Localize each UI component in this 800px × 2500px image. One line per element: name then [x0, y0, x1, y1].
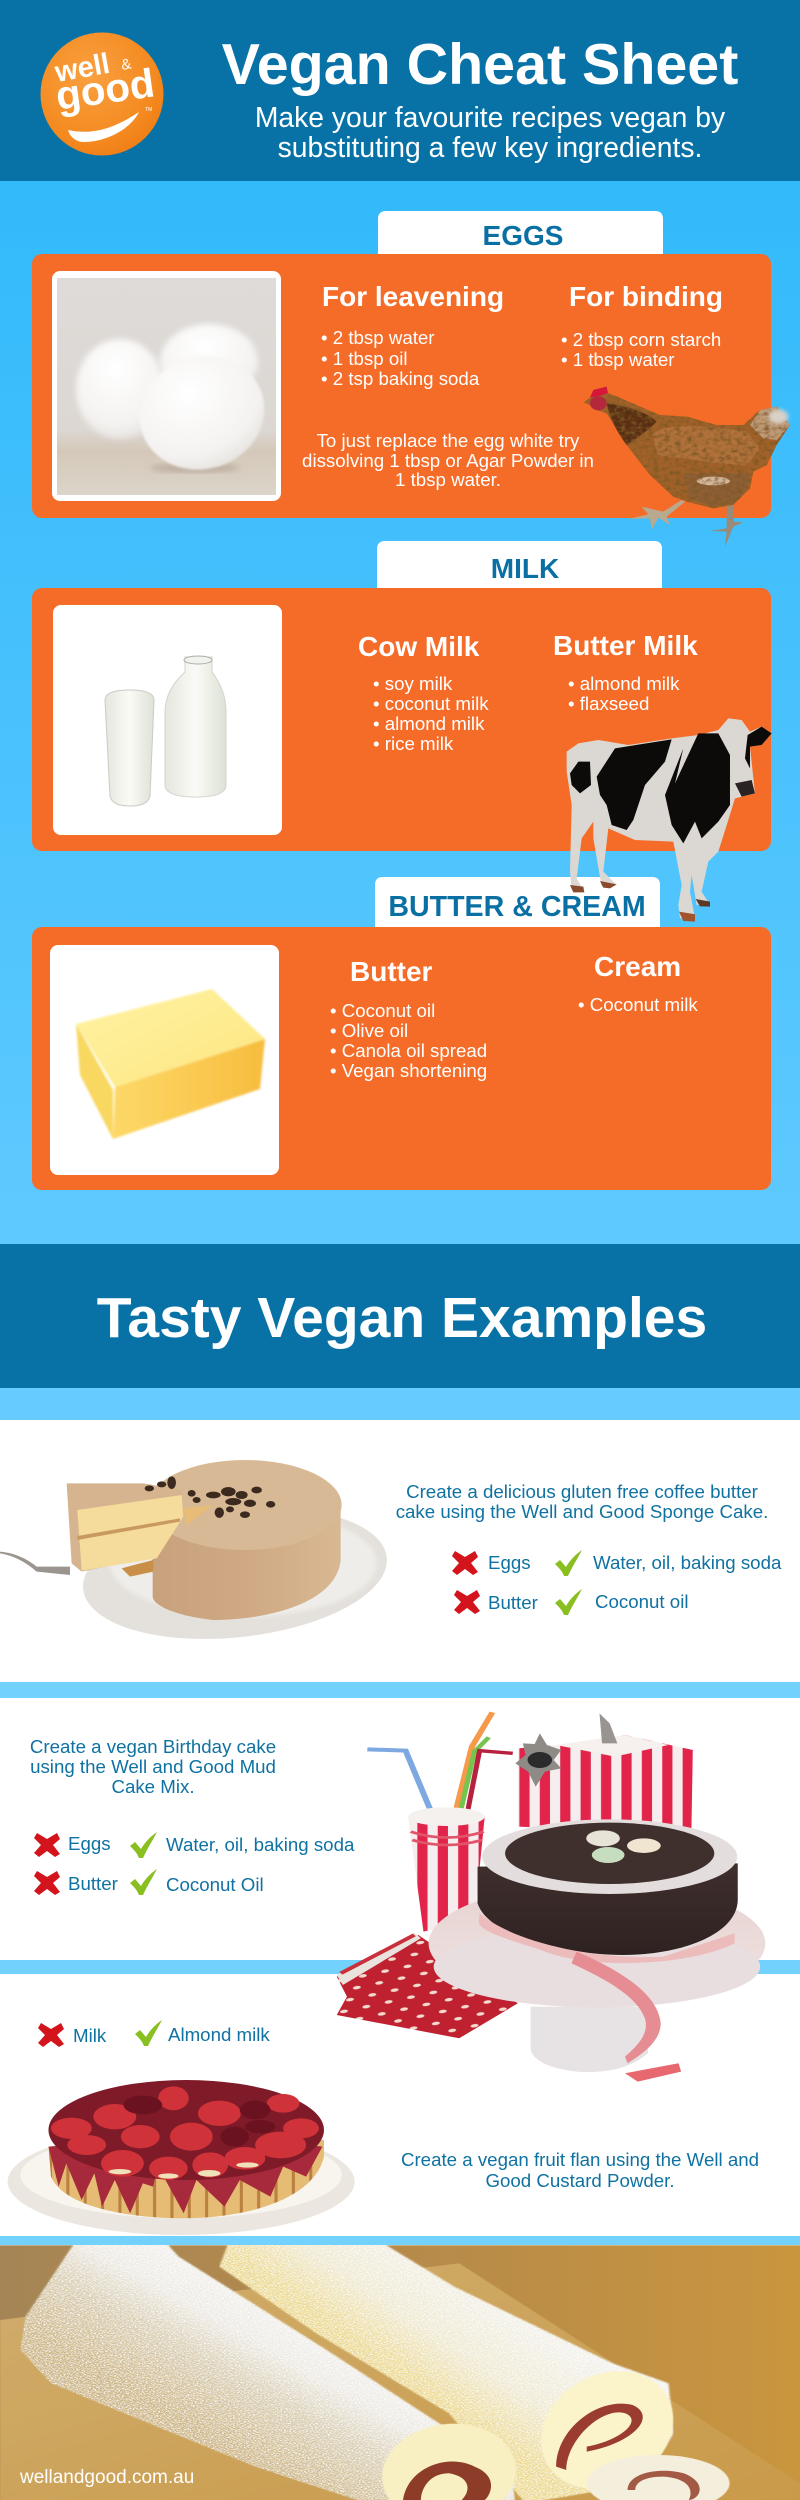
list: butter milk: • almond milk	[568, 673, 680, 694]
text: example mud cake: Cake Mix.	[111, 1776, 195, 1797]
tab: butter and cream: BUTTER & CREAM	[388, 891, 646, 923]
cup	[408, 1810, 485, 1932]
back roll	[219, 2240, 673, 2500]
panel: example fruit flan	[0, 1974, 800, 2236]
swap row: butter	[454, 1589, 688, 1615]
front roll end	[382, 2424, 516, 2500]
logo: good	[53, 60, 157, 119]
straws	[367, 1749, 439, 1830]
list: butter milk: • flaxseed	[568, 693, 649, 714]
list: cow milk: • soy milk	[373, 673, 453, 694]
list: butter: • Coconut oil	[330, 1000, 435, 1021]
panel: milk	[32, 588, 771, 851]
swap row: eggs: Eggs	[488, 1552, 531, 1573]
tab: milk	[377, 541, 662, 588]
strip	[0, 2236, 800, 2245]
swap row: eggs	[452, 1550, 782, 1576]
note: egg white: 1 tbsp water.	[395, 469, 501, 490]
title: Vegan Cheat Sheet	[222, 33, 738, 97]
list: butter: • Canola oil spread	[330, 1040, 487, 1061]
stand	[531, 2007, 648, 2072]
subtitle: substituting a few key ingredients.	[278, 131, 702, 163]
photo: fruit flan	[8, 2080, 355, 2235]
list: cow milk: • coconut milk	[373, 693, 489, 714]
tab: eggs	[378, 211, 663, 254]
note: egg white: dissolving 1 tbsp or Agar Powder in	[302, 450, 594, 471]
swap row: butter	[34, 1869, 264, 1895]
panel: example birthday cake	[0, 1698, 800, 1960]
band: tasty vegan examples	[0, 1244, 800, 1388]
logo: &	[120, 55, 133, 74]
heading: cream: Cream	[594, 951, 681, 982]
text: example sponge cake: cake using the Well and Good Sponge Cake.	[396, 1501, 768, 1522]
photo: butter block	[50, 945, 279, 1175]
heading: for binding: For binding	[569, 281, 723, 312]
photo: eggs	[52, 271, 281, 501]
tab: milk: MILK	[491, 553, 559, 584]
note: egg white: To just replace the egg white try	[317, 430, 580, 451]
back roll end	[540, 2371, 674, 2488]
list: leavening: • 2 tbsp water	[321, 327, 435, 348]
ribbon	[479, 1913, 735, 1963]
tab: eggs: EGGS	[483, 220, 563, 251]
list: leavening: • 2 tsp baking soda	[321, 368, 480, 389]
text: example sponge cake: Create a delicious gluten free coffee butter	[406, 1481, 758, 1502]
swap row: milk: Almond milk	[168, 2024, 270, 2045]
photo: milk glass and bottle	[53, 605, 282, 835]
swap row: butter: Coconut Oil	[166, 1874, 264, 1895]
list: cow milk: • rice milk	[373, 733, 454, 754]
text: example mud cake: Create a vegan Birthday cake	[30, 1736, 276, 1757]
list: butter: • Vegan shortening	[330, 1060, 487, 1081]
list: cream: • Coconut milk	[578, 994, 698, 1015]
header band	[0, 0, 800, 181]
swap row: butter: Butter	[68, 1873, 118, 1894]
text: example custard: Create a vegan fruit flan using the Well and	[401, 2149, 759, 2170]
strip	[0, 1960, 800, 1974]
icon: hen	[584, 387, 790, 547]
footer url: wellandgood.com.au	[19, 2467, 194, 2488]
panel: butter and cream	[32, 927, 771, 1190]
swap row: eggs: Eggs	[68, 1833, 111, 1854]
photo: jam sponge rolls	[0, 2240, 800, 2500]
swap row: butter: Coconut oil	[595, 1591, 688, 1612]
photo: coffee butter cake	[0, 1460, 393, 1653]
swap row: eggs: Water, oil, baking soda	[166, 1834, 355, 1855]
board	[0, 2263, 800, 2500]
swap row: milk: Milk	[73, 2025, 107, 2046]
icon: cow	[567, 718, 772, 922]
swap row: eggs: Water, oil, baking soda	[593, 1552, 782, 1573]
list: leavening: • 1 tbsp oil	[321, 348, 408, 369]
subtitle: Make your favourite recipes vegan by	[255, 101, 726, 133]
page background	[0, 0, 800, 1420]
swap row: eggs	[34, 1832, 355, 1858]
text: example mud cake: using the Well and Good Mud	[30, 1756, 276, 1777]
logo: TM	[145, 107, 152, 113]
front roll	[20, 2240, 515, 2500]
bag	[518, 1735, 693, 1833]
panel: example sponge cake	[0, 1420, 800, 1682]
napkin	[337, 1935, 518, 2038]
list: binding: • 1 tbsp water	[561, 349, 675, 370]
tab: butter and cream	[375, 877, 660, 927]
cake	[478, 1863, 738, 1955]
heading: for leavening: For leavening	[322, 281, 504, 312]
strip below band	[0, 1388, 800, 1420]
heading: cow milk: Cow Milk	[358, 631, 480, 662]
list: cow milk: • almond milk	[373, 713, 485, 734]
coffee beans	[145, 1476, 275, 1518]
logo	[40, 32, 164, 156]
band: tasty vegan examples: Tasty Vegan Examples	[97, 1286, 707, 1350]
list: butter: • Olive oil	[330, 1020, 408, 1041]
photo: birthday cake on stand	[337, 1712, 765, 2082]
text: example custard: Good Custard Powder.	[485, 2170, 675, 2191]
heading: butter milk: Butter Milk	[553, 630, 698, 661]
strip	[0, 1682, 800, 1698]
list: binding: • 2 tbsp corn starch	[561, 329, 721, 350]
swap row: butter: Butter	[488, 1592, 538, 1613]
small slice	[587, 2455, 730, 2500]
logo: well	[52, 48, 112, 89]
panel: eggs	[32, 254, 771, 518]
swap row: milk	[38, 2020, 270, 2047]
heading: butter: Butter	[350, 956, 433, 987]
